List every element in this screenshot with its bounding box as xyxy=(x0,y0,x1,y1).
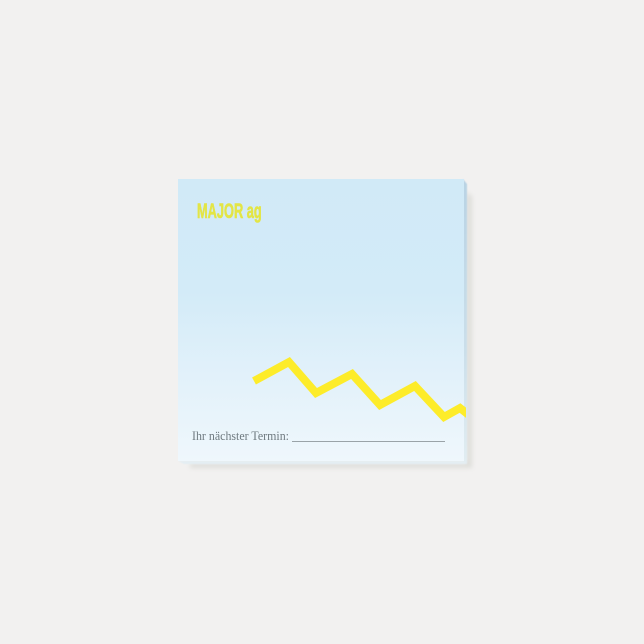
note pad side edges xyxy=(178,179,467,464)
sticky note product illustration xyxy=(178,179,473,469)
note paper xyxy=(178,179,464,461)
appointment write-in line xyxy=(292,441,445,442)
yellow zigzag line xyxy=(254,362,470,417)
company name: MAJOR ag xyxy=(197,199,262,223)
appointment label: Ihr nächster Termin: xyxy=(192,428,289,443)
note pad shadow xyxy=(190,192,472,468)
